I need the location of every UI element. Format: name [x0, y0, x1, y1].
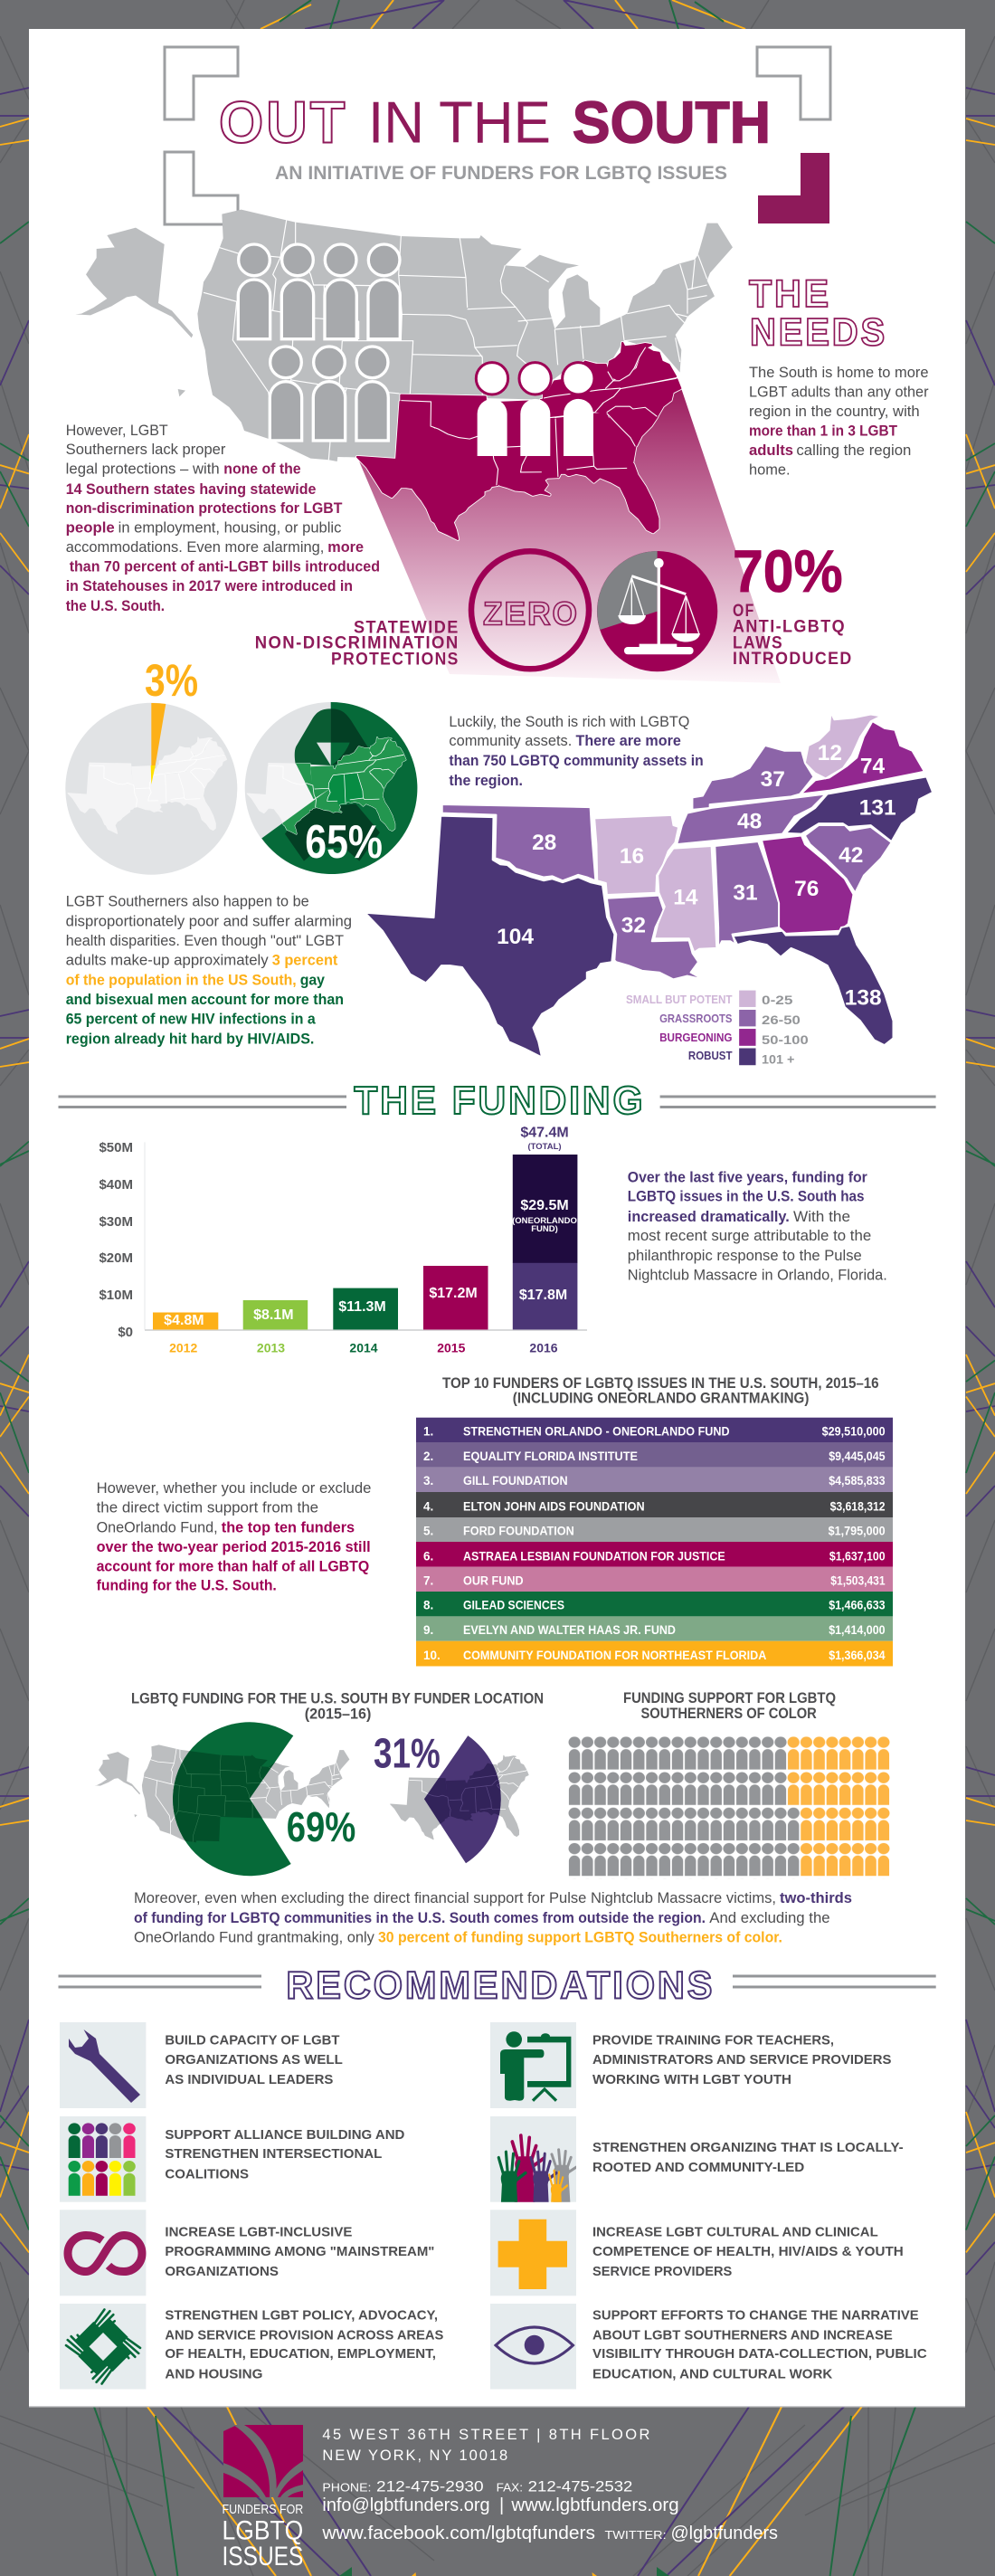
label: statewide non-discrimination protections: [255, 618, 460, 670]
bar chart: funding 2012 to 2016: $50M: [99, 1140, 133, 1155]
footer logo: [223, 2425, 303, 2571]
text: the South is home: adults: [749, 442, 793, 459]
text: policy advocacy: STRENGTHEN LGBT POLICY, ADVOCACY,: [165, 2307, 438, 2323]
footer logo: FUNDERS FOR: [223, 2502, 303, 2517]
title: SOUTH: [573, 89, 771, 156]
icon: infinity loop: [60, 2210, 146, 2296]
heading: funding support of color: FUNDING SUPPORT FOR LGBTQ: [623, 1689, 836, 1706]
table: top 10 funders: OUR FUND: [463, 1573, 524, 1587]
text: change the narrative: ABOUT LGBT SOUTHERNERS AND INCREASE: [592, 2327, 893, 2343]
text: however LGBT southerners: legal protections – with: [66, 461, 220, 478]
bar chart: funding 2012 to 2016: $8.1M: [253, 1307, 294, 1323]
footer contact details: NEW YORK, NY 10018: [322, 2448, 507, 2464]
map legend: SMALL BUT POTENT: [626, 993, 733, 1006]
footer contact details: FAX:: [497, 2480, 523, 2494]
pie map: 69 percent outside the South: 69%: [287, 1803, 355, 1850]
bar chart: funding 2012 to 2016: 2016: [529, 1341, 558, 1355]
text: build capacity: AS INDIVIDUAL LEADERS: [165, 2072, 333, 2087]
text: over the last five years: Over the last five years, funding for: [628, 1170, 867, 1186]
table: top 10 funders: $1,366,034: [829, 1649, 886, 1662]
stat: 70 percent of anti-LGBTQ laws: LAWS: [733, 633, 783, 653]
map: LGBTQ community assets by state: 76: [794, 877, 819, 901]
map: LGBTQ community assets by state: 42: [839, 843, 863, 868]
bar chart: funding 2012 to 2016: 2015: [437, 1341, 466, 1355]
heading: recommendations: [58, 1963, 936, 2007]
table: top 10 funders: 6.: [423, 1549, 433, 1564]
icon: zero circle: ZERO: [483, 595, 579, 632]
heading: top 10 funders: [442, 1374, 879, 1407]
text: luckily the South is rich: community assets.: [449, 733, 572, 749]
text: the South is home: LGBT adults than any other: [749, 384, 929, 400]
text: LGBT Southerners also happen: and bisexual men account for more than: [66, 992, 344, 1008]
bar chart: funding 2012 to 2016: $4.8M: [164, 1313, 204, 1328]
map: LGBTQ community assets by state: 14: [673, 886, 698, 910]
heading: the funding: [58, 1079, 936, 1123]
text: over the last five years: Nightclub Massacre in Orlando, Florida.: [628, 1267, 887, 1283]
text: policy advocacy: OF HEALTH, EDUCATION, EMPLOYMENT,: [165, 2346, 436, 2362]
footer contact details: 212-475-2930: [376, 2477, 484, 2495]
table: top 10 funders: 7.: [423, 1573, 433, 1587]
table: top 10 funders: $29,510,000: [822, 1424, 886, 1439]
map legend: 101 +: [762, 1052, 794, 1066]
text: however LGBT southerners: Southerners lack proper: [66, 442, 226, 458]
icon: three white people, the South: [476, 363, 594, 456]
text: however LGBT southerners: in employment, housing, or public: [118, 520, 341, 537]
text: luckily the South is rich: There are more: [575, 733, 681, 749]
table: top 10 funders: 4.: [423, 1499, 433, 1513]
text: whether you include or exclude: account for more than half of all LGBTQ: [97, 1558, 369, 1574]
stat: 70 percent of anti-LGBTQ laws: INTRODUCED: [733, 650, 853, 669]
text: however LGBT southerners: [66, 423, 380, 614]
text: however LGBT southerners: none of the: [223, 461, 301, 478]
text: whether you include or exclude: [97, 1480, 371, 1593]
text: increase inclusive programming: INCREASE LGBT-INCLUSIVE: [165, 2224, 352, 2239]
text: LGBT Southerners also happen: disproportionately poor and suffer alarming: [66, 913, 352, 929]
text: moreover even when excluding: 30 percent of funding support LGBTQ Southerners of color.: [378, 1930, 782, 1946]
text: moreover even when excluding: OneOrlando Fund grantmaking, only: [134, 1930, 375, 1946]
text: provide training: PROVIDE TRAINING FOR TEACHERS,: [592, 2032, 834, 2048]
text: strengthen organizing: ROOTED AND COMMUNITY-LED: [592, 2160, 804, 2175]
heading: recommendations: RECOMMENDATIONS: [286, 1963, 715, 2007]
text: increase inclusive programming: PROGRAMMING AMONG "MAINSTREAM": [165, 2244, 434, 2259]
stat: 70 percent of anti-LGBTQ laws: ANTI-LGBTQ: [733, 617, 846, 637]
text: luckily the South is rich: Luckily, the South is rich with LGBTQ: [449, 714, 690, 730]
bar chart: funding 2012 to 2016: $40M: [99, 1177, 133, 1193]
map: LGBTQ community assets by state: [365, 713, 933, 1057]
text: however LGBT southerners: people: [66, 520, 115, 537]
text: luckily the South is rich: the region.: [449, 773, 523, 789]
table: top 10 funders: 1.: [423, 1424, 433, 1439]
bar chart: funding 2012 to 2016: $30M: [99, 1214, 133, 1230]
text: provide training: WORKING WITH LGBT YOUTH: [592, 2072, 791, 2087]
pie chart: 3 percent of population: [65, 703, 237, 875]
text: change the narrative: VISIBILITY THROUGH DATA-COLLECTION, PUBLIC: [592, 2346, 927, 2362]
bar chart: funding 2012 to 2016: 2012: [169, 1341, 197, 1355]
bar chart: funding 2012 to 2016: $47.4M: [520, 1126, 569, 1140]
footer contact details: @lgbtfunders: [671, 2524, 778, 2543]
text: strengthen organizing: [592, 2140, 904, 2175]
icon: health cross: [490, 2210, 576, 2296]
text: over the last five years: increased dramatically.: [628, 1209, 790, 1225]
table: top 10 funders: [416, 1418, 893, 1667]
map legend: [626, 991, 809, 1066]
text: whether you include or exclude: OneOrlando Fund,: [97, 1519, 218, 1535]
table: top 10 funders: $3,618,312: [830, 1499, 886, 1513]
map: LGBTQ community assets by state: 131: [859, 796, 896, 821]
text: luckily the South is rich: [449, 714, 704, 789]
text: LGBT Southerners also happen: 65 percent of new HIV infections in a: [66, 1012, 316, 1028]
bar chart: funding 2012 to 2016: [99, 1126, 587, 1355]
text: change the narrative: [592, 2307, 927, 2381]
text: over the last five years: LGBTQ issues in the U.S. South has: [628, 1189, 865, 1205]
text: moreover even when excluding: And excluding the: [709, 1910, 830, 1926]
stat: 70 percent of anti-LGBTQ laws: OF: [733, 602, 754, 621]
table: top 10 funders: $1,795,000: [829, 1524, 886, 1537]
text: however LGBT southerners: However, LGBT: [66, 423, 168, 439]
icon: wrench: [60, 2022, 146, 2108]
text: support alliance building: STRENGTHEN INTERSECTIONAL: [165, 2146, 382, 2162]
table: top 10 funders: $1,466,633: [829, 1598, 886, 1611]
table: top 10 funders: $4,585,833: [829, 1474, 886, 1488]
panel bottom edge: [29, 2406, 965, 2407]
text: policy advocacy: [165, 2307, 443, 2381]
map: LGBTQ community assets by state: 32: [621, 914, 646, 938]
text: LGBT Southerners also happen: 3 percent: [272, 953, 338, 969]
heading: funding support of color: SOUTHERNERS OF COLOR: [640, 1705, 817, 1722]
text: over the last five years: With the: [793, 1209, 850, 1225]
table: top 10 funders: $9,445,045: [829, 1450, 886, 1463]
text: support alliance building: [165, 2127, 405, 2182]
footer logo: LGBTQ: [223, 2516, 303, 2546]
text: cultural competence: [592, 2224, 904, 2279]
table: top 10 funders: EVELYN AND WALTER HAAS JR. FUND: [463, 1623, 676, 1637]
label: statewide non-discrimination protections: STATEWIDE: [354, 618, 460, 637]
gradient callout beam: [357, 380, 781, 683]
table: top 10 funders: 2.: [423, 1450, 433, 1463]
label: statewide non-discrimination protections: PROTECTIONS: [331, 651, 460, 670]
text: the South is home: home.: [749, 461, 791, 478]
bracket frame: title corners: [165, 47, 830, 224]
bar chart: funding 2012 to 2016: (ONEORLANDO: [512, 1216, 577, 1226]
text: cultural competence: SERVICE PROVIDERS: [592, 2264, 732, 2279]
pie chart: 65 percent of new HIV infections with ribbon: [245, 702, 417, 874]
text: whether you include or exclude: the top ten funders: [222, 1519, 355, 1535]
text: support alliance building: SUPPORT ALLIANCE BUILDING AND: [165, 2127, 405, 2143]
bar chart: funding 2012 to 2016: FUND): [531, 1224, 558, 1234]
footer contact details: [321, 2427, 778, 2543]
map: contiguous US in gray: [75, 210, 733, 461]
text: moreover even when excluding: of funding for LGBTQ communities in the U.S. South comes from outside the region.: [134, 1910, 706, 1926]
text: provide training: [592, 2032, 891, 2087]
text: moreover even when excluding: [134, 1890, 852, 1946]
map legend: ROBUST: [688, 1049, 733, 1062]
table: top 10 funders: 9.: [423, 1623, 433, 1637]
heading: the needs: NEEDS: [750, 311, 887, 355]
map: LGBTQ community assets by state: 28: [532, 831, 556, 855]
text: change the narrative: EDUCATION, AND CULTURAL WORK: [592, 2366, 832, 2381]
map: LGBTQ community assets by state: 138: [845, 986, 882, 1011]
table: top 10 funders: $1,503,431: [830, 1573, 886, 1587]
text: strengthen organizing: STRENGTHEN ORGANIZING THAT IS LOCALLY-: [592, 2140, 904, 2155]
icon: scales pie 70 percent: [597, 551, 717, 671]
text: however LGBT southerners: accommodations. Even more alarming,: [66, 539, 324, 556]
text: the South is home: more than 1 in 3 LGBT: [749, 423, 897, 440]
text: build capacity: [165, 2032, 343, 2087]
text: cultural competence: INCREASE LGBT CULTURAL AND CLINICAL: [592, 2224, 878, 2239]
text: support alliance building: COALITIONS: [165, 2166, 249, 2182]
table: top 10 funders: ASTRAEA LESBIAN FOUNDATION FOR JUSTICE: [463, 1549, 725, 1564]
table: top 10 funders: $1,637,100: [829, 1549, 886, 1564]
table: top 10 funders: $1,414,000: [829, 1623, 886, 1637]
text: whether you include or exclude: over the two-year period 2015-2016 still: [97, 1539, 371, 1555]
text: policy advocacy: AND HOUSING: [165, 2366, 262, 2381]
text: over the last five years: most recent surge attributable to the: [628, 1228, 871, 1244]
text: build capacity: ORGANIZATIONS AS WELL: [165, 2052, 343, 2067]
text: LGBT Southerners also happen: health disparities. Even though "out" LGBT: [66, 933, 344, 949]
map legend: 0-25: [762, 993, 793, 1007]
text: however LGBT southerners: the U.S. South.: [66, 598, 165, 614]
icon: raised hands: [490, 2116, 576, 2202]
map: Southern states in magenta: [357, 343, 680, 539]
icon: colorful people: [60, 2116, 146, 2202]
text: whether you include or exclude: funding for the U.S. South.: [97, 1577, 277, 1593]
table: top 10 funders: STRENGTHEN ORLANDO - ONEORLANDO FUND: [463, 1424, 730, 1439]
footer contact details: |: [499, 2495, 504, 2515]
table: top 10 funders: 10.: [423, 1649, 441, 1662]
text: cultural competence: COMPETENCE OF HEALTH, HIV/AIDS & YOUTH: [592, 2244, 904, 2259]
map legend: BURGEONING: [659, 1031, 732, 1044]
bar chart: funding 2012 to 2016: 2014: [349, 1341, 378, 1355]
icon: four clasped hands: [60, 2304, 146, 2389]
map legend: GRASSROOTS: [659, 1012, 733, 1025]
text: build capacity: BUILD CAPACITY OF LGBT: [165, 2032, 339, 2048]
map: LGBTQ community assets by state: 37: [761, 767, 785, 792]
title: OUT: [219, 89, 347, 156]
subtitle: AN INITIATIVE OF FUNDERS FOR LGBTQ ISSUES: [275, 163, 727, 184]
text: increase inclusive programming: [165, 2224, 434, 2279]
heading: the needs: THE: [749, 272, 831, 316]
footer contact details: www.facebook.com/lgbtqfunders: [321, 2524, 595, 2543]
map legend: 50-100: [762, 1033, 809, 1047]
footer contact details: PHONE:: [322, 2480, 371, 2494]
map: LGBTQ community assets by state: 104: [497, 925, 534, 949]
text: policy advocacy: AND SERVICE PROVISION ACROSS AREAS: [165, 2327, 443, 2343]
title: IN THE: [368, 89, 551, 156]
text: the South is home: region in the country, with: [749, 404, 920, 420]
heading: funding support of color: [623, 1689, 836, 1722]
text: whether you include or exclude: the direct victim support from the: [97, 1500, 318, 1516]
bar chart: funding 2012 to 2016: $11.3M: [338, 1299, 386, 1315]
heading: funding by funder location: LGBTQ FUNDING FOR THE U.S. SOUTH BY FUNDER LOCATION: [131, 1689, 544, 1706]
table: top 10 funders: GILEAD SCIENCES: [463, 1598, 564, 1611]
text: however LGBT southerners: than 70 percent of anti-LGBT bills introduced: [70, 559, 380, 575]
heading: top 10 funders: (INCLUDING ONEORLANDO GRANTMAKING): [513, 1390, 809, 1407]
table: top 10 funders: ELTON JOHN AIDS FOUNDATION: [463, 1499, 645, 1513]
title: [219, 89, 771, 156]
text: however LGBT southerners: in Statehouses in 2017 were introduced in: [66, 578, 353, 594]
text: LGBT Southerners also happen: region already hit hard by HIV/AIDS.: [66, 1031, 314, 1047]
bar chart: funding 2012 to 2016: (TOTAL): [527, 1142, 562, 1152]
bar chart: funding 2012 to 2016: $20M: [99, 1250, 133, 1266]
stat: 3 percent: 3%: [145, 655, 198, 706]
text: change the narrative: SUPPORT EFFORTS TO CHANGE THE NARRATIVE: [592, 2307, 919, 2323]
text: LGBT Southerners also happen: adults make-up approximately: [66, 953, 269, 969]
table: top 10 funders: COMMUNITY FOUNDATION FOR NORTHEAST FLORIDA: [463, 1649, 767, 1662]
footer logo: ISSUES: [223, 2542, 303, 2571]
text: the South is home: [749, 365, 929, 478]
text: moreover even when excluding: Moreover, even when excluding the direct financial support for Pulse Nightclub Massacre victims,: [134, 1890, 776, 1906]
pie map: 69 percent outside the South: [95, 1722, 355, 1876]
map: LGBTQ community assets by state: 16: [620, 844, 644, 869]
text: LGBT Southerners also happen: gay: [300, 972, 326, 988]
pie map: 31 percent in the South: 31%: [374, 1729, 441, 1776]
pie map: 31 percent in the South: [374, 1729, 528, 1863]
heading: the needs: [749, 272, 887, 355]
footer contact details: 45 WEST 36TH STREET | 8TH FLOOR: [322, 2427, 649, 2443]
heading: funding by funder location: [131, 1689, 544, 1722]
map: LGBTQ community assets by state: 74: [860, 755, 885, 779]
text: whether you include or exclude: However, whether you include or exclude: [97, 1480, 371, 1497]
text: however LGBT southerners: 14 Southern states having statewide: [66, 481, 316, 498]
text: however LGBT southerners: non-discrimination protections for LGBT: [66, 500, 342, 517]
text: LGBT Southerners also happen: of the population in the US South,: [66, 972, 297, 988]
icon: eye: [490, 2304, 576, 2389]
stat: 70 percent of anti-LGBTQ laws: 70%: [733, 537, 843, 604]
map: LGBTQ community assets by state: 12: [818, 741, 842, 765]
footer contact details: 212-475-2532: [528, 2477, 632, 2495]
text: moreover even when excluding: two-thirds: [780, 1890, 852, 1906]
footer contact details: TWITTER:: [604, 2528, 667, 2542]
bar chart: funding 2012 to 2016: $10M: [99, 1288, 133, 1303]
bar chart: funding 2012 to 2016: $29.5M: [520, 1198, 569, 1213]
footer contact details: info@lgbtfunders.org: [322, 2495, 490, 2515]
text: luckily the South is rich: than 750 LGBTQ community assets in: [449, 753, 704, 769]
table: top 10 funders: FORD FOUNDATION: [463, 1524, 574, 1537]
table: top 10 funders: 3.: [423, 1474, 433, 1488]
heading: funding by funder location: (2015–16): [305, 1705, 371, 1722]
bar chart: funding 2012 to 2016: $17.8M: [519, 1288, 567, 1303]
text: over the last five years: [628, 1170, 887, 1283]
heading: the funding: THE FUNDING: [354, 1079, 645, 1123]
text: the South is home: calling the region: [796, 442, 911, 459]
bar chart: funding 2012 to 2016: $0: [118, 1325, 133, 1340]
icon: zero circle: [471, 551, 589, 669]
icon: presenter at board: [490, 2022, 576, 2108]
text: over the last five years: philanthropic response to the Pulse: [628, 1248, 862, 1264]
text: increase inclusive programming: ORGANIZATIONS: [165, 2264, 279, 2279]
icon: seven gray people, rest of the country: [238, 244, 400, 441]
bar chart: funding 2012 to 2016: $17.2M: [429, 1286, 478, 1301]
bar chart: funding 2012 to 2016: 2013: [257, 1341, 285, 1355]
map legend: 26-50: [762, 1013, 801, 1027]
label: statewide non-discrimination protections: NON-DISCRIMINATION: [255, 634, 460, 653]
text: LGBT Southerners also happen: LGBT Southerners also happen to be: [66, 894, 309, 910]
text: provide training: ADMINISTRATORS AND SERVICE PROVIDERS: [592, 2052, 891, 2067]
table: top 10 funders: 8.: [423, 1598, 433, 1611]
map: LGBTQ community assets by state: 31: [733, 880, 758, 905]
text: LGBT Southerners also happen: [66, 894, 352, 1047]
heading: top 10 funders: TOP 10 FUNDERS OF LGBTQ ISSUES IN THE U.S. SOUTH, 2015–16: [442, 1374, 879, 1392]
text: however LGBT southerners: more: [327, 539, 364, 556]
stat: 70 percent of anti-LGBTQ laws: [733, 537, 853, 669]
table: top 10 funders: GILL FOUNDATION: [463, 1474, 568, 1488]
pie chart: 65 percent of new HIV infections with ribbon: 65%: [305, 816, 383, 869]
map: LGBTQ community assets by state: 48: [737, 809, 762, 833]
text: the South is home: The South is home to more: [749, 365, 928, 381]
footer contact details: www.lgbtfunders.org: [510, 2495, 679, 2515]
table: top 10 funders: 5.: [423, 1524, 433, 1537]
pictogram: people grid, 30 percent people of color: [568, 1736, 890, 1878]
table: top 10 funders: EQUALITY FLORIDA INSTITUTE: [463, 1450, 638, 1463]
